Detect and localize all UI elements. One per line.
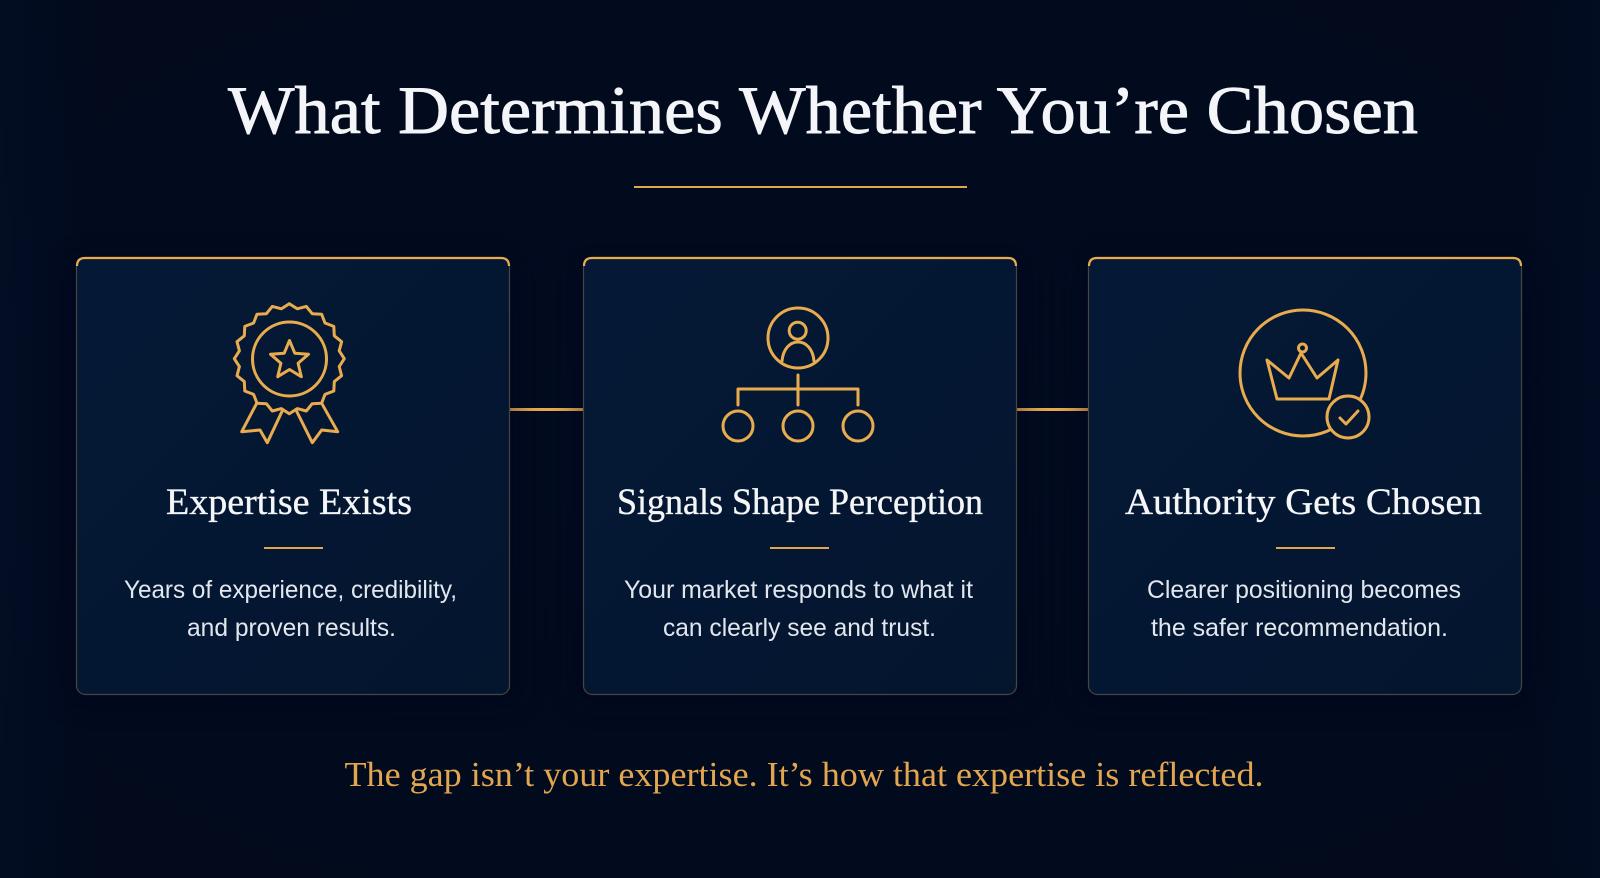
connector: card 2 to card 3 [1017,408,1088,411]
card heading: Authority Gets Chosen [1125,482,1482,523]
card body text: and proven results. [187,614,396,642]
card body text: Clearer positioning becomes [1147,576,1461,604]
icon: crown with check badge [1240,310,1369,438]
panel: authority gets chosen [1080,258,1530,702]
card body text: Your market responds to what it [624,576,973,604]
card heading: Signals Shape Perception [617,482,983,523]
connector: card 1 to card 2 [510,408,583,411]
card body text: the safer recommendation. [1151,614,1448,642]
card body text: Years of experience, credibility, [124,576,457,604]
icon: person hierarchy [723,308,873,441]
panel: expertise exists [68,258,518,702]
closing statement: The gap isn’t your expertise. It’s how that expertise is reflected. [344,755,1264,794]
card divider [770,547,829,549]
card body text [124,576,457,642]
title divider [634,186,967,188]
card divider [264,547,323,549]
card body text [1147,576,1461,642]
icon: rosette with star [234,304,344,443]
card body text: can clearly see and trust. [663,614,936,642]
card divider [1276,547,1335,549]
title: What Determines Whether You’re Chosen [228,72,1418,148]
card heading: Expertise Exists [166,482,412,523]
card body text [624,576,973,642]
panel: signals shape perception [575,258,1025,702]
